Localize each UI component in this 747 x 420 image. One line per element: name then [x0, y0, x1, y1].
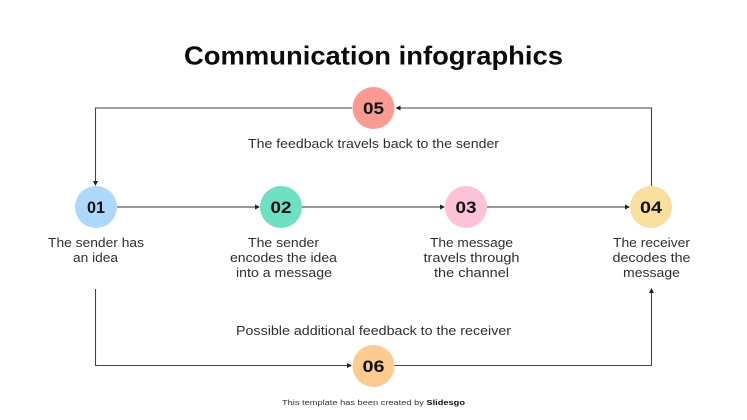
- arrow: 03 to 04: [487, 204, 630, 210]
- step 05 badge: 05: [363, 99, 384, 118]
- title: Communication infographics: [184, 40, 563, 70]
- step 03 text: travels through: [424, 251, 520, 265]
- step 01 text: The sender has: [48, 236, 144, 250]
- step 05 badge: [352, 87, 394, 129]
- arrow: 01 to 06: [96, 289, 352, 368]
- step 02 text: [230, 236, 337, 280]
- step 04 badge: [630, 186, 672, 228]
- step 03 text: [424, 236, 520, 280]
- step 04 text: message: [623, 266, 680, 280]
- step 03 badge: 03: [456, 198, 476, 217]
- step 02 badge: [260, 186, 302, 228]
- step 01 badge: 01: [87, 198, 105, 217]
- footer credit: This template has been created by Slidesgo: [282, 398, 466, 407]
- step 03 badge: [445, 186, 487, 228]
- arrow: 04 to 05: [396, 106, 652, 186]
- arrow: 06 to 04: [394, 288, 654, 366]
- arrow: 02 to 03: [302, 204, 445, 210]
- step 01 badge: [75, 186, 117, 228]
- step 02 text: The sender: [248, 236, 319, 250]
- step 04 text: decodes the: [612, 251, 691, 265]
- step 02 text: encodes the idea: [230, 251, 337, 265]
- step 02 badge: 02: [270, 198, 292, 217]
- arrow: 01 to 02: [117, 204, 260, 210]
- step 04 badge: 04: [640, 198, 663, 217]
- arrow: 05 to 01: [93, 108, 352, 186]
- step 06 text: Possible additional feedback to the receiver: [236, 324, 511, 338]
- step 06 badge: [352, 345, 394, 387]
- step 01 text: an idea: [73, 251, 118, 265]
- step 04 text: The receiver: [613, 236, 690, 250]
- step 03 text: the channel: [434, 266, 509, 280]
- step 06 badge: 06: [362, 357, 384, 376]
- step 01 text: [48, 236, 144, 265]
- step 02 text: into a message: [236, 266, 332, 280]
- step 03 text: The message: [430, 236, 513, 250]
- step 05 text: The feedback travels back to the sender: [248, 137, 499, 151]
- step 04 text: [612, 236, 691, 280]
